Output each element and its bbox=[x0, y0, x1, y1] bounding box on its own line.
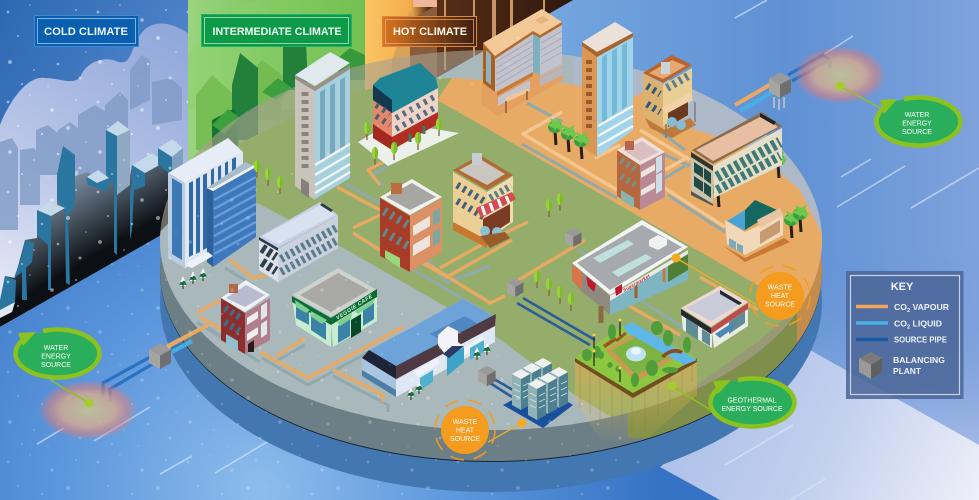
callout: water energy source left: SOURCE bbox=[41, 362, 71, 369]
palm trees in hot zone bbox=[547, 118, 809, 238]
key item: CO2 vapour: VAPOUR bbox=[910, 302, 949, 312]
building: servers data centre bbox=[503, 358, 573, 428]
callout: water energy source left: ENERGY bbox=[41, 354, 71, 360]
pipes: CO2 vapour lines cold and green zones bbox=[167, 160, 758, 402]
key item: CO2 liquid: CO bbox=[894, 318, 907, 328]
building: grey white office bbox=[259, 202, 338, 282]
building: supermarket: Supermarket bbox=[622, 273, 651, 293]
building: long stone offices bbox=[691, 112, 782, 206]
label: hot climate bbox=[382, 16, 476, 46]
key item: CO2 vapour: CO bbox=[894, 302, 907, 312]
building: tan apartments with awning bbox=[453, 153, 516, 248]
key item: balancing plant bbox=[859, 352, 945, 379]
panel: cold climate skyline bbox=[0, 0, 188, 330]
building: red brick apartments bbox=[380, 179, 442, 272]
cafe sign: VEGGIE CAFE bbox=[336, 293, 373, 322]
faded background towers bbox=[0, 55, 182, 230]
callout: geothermal energy source: ENERGY SOURCE bbox=[721, 406, 783, 413]
callout: waste heat source bottom bbox=[435, 400, 526, 460]
callout: water energy source right: WATER bbox=[905, 112, 929, 119]
callout: water energy source left: WATER bbox=[44, 345, 68, 352]
platform: translucent top surface bbox=[160, 50, 822, 430]
park with fountain bbox=[575, 318, 697, 398]
key item: source pipe: SOURCE PIPE bbox=[894, 334, 947, 344]
snow trees by tower bbox=[179, 268, 207, 289]
callout: waste heat source bottom: WASTE bbox=[453, 419, 478, 426]
platform: side wall bbox=[160, 250, 822, 462]
callout: water energy source left bbox=[14, 330, 138, 440]
hotel trees bbox=[364, 118, 442, 165]
callout: waste heat source right: WASTE bbox=[768, 284, 793, 292]
building: small tan corner shop bbox=[643, 55, 696, 138]
callout: waste heat source bottom: HEAT bbox=[456, 428, 475, 434]
water source pipe right bbox=[735, 55, 830, 111]
key item: CO2 liquid: LIQUID bbox=[910, 318, 942, 328]
panel: intermediate climate skyline bbox=[188, 0, 365, 177]
label: hot climate: HOT CLIMATE bbox=[393, 26, 467, 38]
snow overlay on cold ground bbox=[0, 0, 640, 500]
underground geothermal boreholes bbox=[575, 358, 697, 445]
key item: CO2 liquid: 2 bbox=[907, 324, 910, 330]
label: intermediate climate bbox=[202, 14, 352, 46]
green trees near tower bbox=[254, 160, 283, 194]
callout: water energy source right: SOURCE bbox=[902, 129, 932, 136]
building: teal roof house bbox=[722, 200, 790, 262]
callout: waste heat source right bbox=[672, 254, 810, 326]
building: blue tower bbox=[168, 138, 256, 268]
callout: water energy source right: ENERGY bbox=[902, 120, 932, 128]
zone: hot orange ground bbox=[437, 78, 830, 308]
city silhouette bbox=[0, 121, 183, 327]
label: cold climate: COLD CLIMATE bbox=[44, 26, 128, 38]
water source pipe left bbox=[103, 325, 208, 402]
pipes: source lines bbox=[490, 298, 595, 397]
building: restaurant bbox=[681, 286, 748, 348]
key item: CO2 vapour: 2 bbox=[907, 308, 910, 314]
panel: hot climate skyline bbox=[365, 0, 573, 90]
key title: KEY bbox=[891, 281, 914, 293]
green trees by supermarket bbox=[534, 193, 574, 311]
key item: balancing plant: BALANCING bbox=[893, 355, 945, 365]
building: tall hot tower bbox=[582, 22, 633, 157]
teal tower faces bbox=[0, 121, 183, 318]
panel: key legend bbox=[846, 271, 964, 399]
building: supermarket bbox=[572, 220, 688, 323]
zone: cold grey ground bbox=[160, 224, 611, 430]
callout: waste heat source right: HEAT bbox=[771, 293, 790, 300]
key item: CO2 liquid bbox=[856, 318, 942, 330]
snow trees by mall bbox=[407, 342, 491, 400]
balancing plants bbox=[149, 72, 791, 386]
building: maroon townhouse bbox=[221, 280, 270, 354]
callout: water energy source right bbox=[794, 46, 960, 146]
callout: waste heat source bottom: SOURCE bbox=[450, 436, 480, 443]
clouds bbox=[0, 23, 188, 330]
platform: lower blue disc bbox=[160, 112, 822, 492]
building: pink townhouse bbox=[617, 137, 665, 210]
pipes: grey return lines bbox=[197, 103, 725, 412]
building: large tan office bbox=[482, 9, 563, 116]
building: green veggie cafe bbox=[292, 268, 377, 347]
callout: waste heat source right: SOURCE bbox=[765, 302, 795, 308]
key item: CO2 vapour bbox=[856, 302, 949, 314]
callout: geothermal energy source bbox=[668, 379, 794, 427]
building: grey white tower bbox=[295, 52, 350, 200]
pipes: CO2 vapour lines hot zone bbox=[523, 112, 725, 227]
zone: intermediate green ground bbox=[200, 78, 797, 425]
building: blue roof mall bbox=[362, 299, 496, 397]
key item: balancing plant: PLANT bbox=[893, 366, 922, 376]
callout: geothermal energy source: GEOTHERMAL bbox=[727, 398, 777, 404]
label: cold climate bbox=[34, 16, 138, 46]
building: teal roof hotel with plaza bbox=[358, 63, 459, 166]
label: intermediate climate: INTERMEDIATE CLIMATE bbox=[212, 26, 342, 38]
